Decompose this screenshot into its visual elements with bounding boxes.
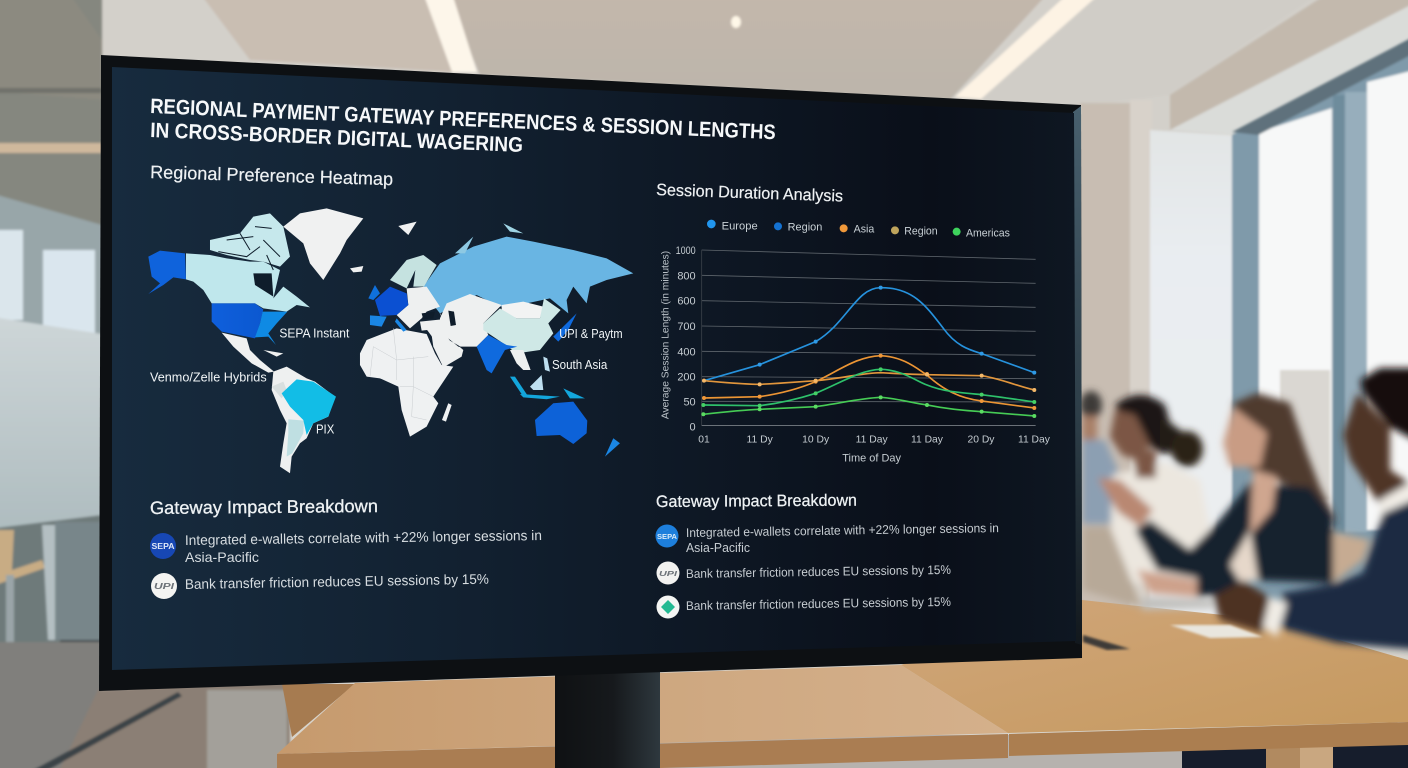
Alaska bbox=[148, 251, 186, 294]
China bbox=[483, 298, 561, 353]
y axis labels: 600 bbox=[677, 296, 696, 308]
India bbox=[477, 335, 517, 373]
text: bank transfer: Bank transfer friction reduces EU sessions by 15% bbox=[686, 563, 951, 581]
legend: Europe bbox=[722, 220, 758, 232]
text: e-wallets: Integrated e-wallets correlate with +22% longer sessions in bbox=[686, 521, 999, 540]
icon: green diamond bbox=[656, 596, 680, 618]
map labels: SEPA Instant bbox=[279, 325, 350, 340]
monitor right edge bbox=[1073, 106, 1082, 645]
y axis labels: 1000 bbox=[676, 245, 696, 257]
Indonesia bbox=[510, 375, 585, 399]
chair bbox=[1333, 532, 1370, 583]
legend bbox=[707, 220, 1010, 239]
person: far left man bbox=[1080, 391, 1102, 419]
y axis labels bbox=[676, 245, 696, 434]
x axis labels: 11 Day bbox=[911, 434, 944, 445]
table left front bbox=[277, 734, 1008, 768]
x axis labels: 11 Day bbox=[856, 434, 888, 445]
y axis labels: 0 bbox=[690, 422, 696, 434]
y axis labels: 200 bbox=[677, 371, 696, 383]
icon: UPI bbox=[151, 573, 177, 599]
heading: Gateway Impact Breakdown bbox=[656, 492, 857, 511]
series: orange peak bbox=[702, 354, 1036, 410]
x axis labels: 10 Dy bbox=[802, 434, 830, 445]
under-table background bbox=[660, 735, 1408, 768]
Madagascar bbox=[442, 403, 452, 422]
legend: Region bbox=[904, 225, 938, 237]
Africa borders bbox=[370, 303, 473, 420]
left office glass bbox=[0, 0, 102, 768]
series: green lower bbox=[701, 395, 1036, 418]
world map heatmap bbox=[148, 208, 633, 473]
map labels: UPI & Paytm bbox=[559, 326, 623, 341]
people bbox=[1080, 368, 1408, 650]
panel: right gateway impact breakdown: Asia-Pacific bbox=[686, 541, 750, 555]
Africa bbox=[360, 328, 453, 437]
Brazil bbox=[282, 379, 336, 435]
dashboard screen bbox=[112, 67, 1076, 670]
Iran and Central Asia bbox=[440, 294, 502, 347]
Caribbean bbox=[263, 350, 283, 357]
y axis labels: 50 bbox=[683, 396, 696, 408]
cable tray bbox=[1083, 635, 1130, 650]
series: tan bbox=[702, 373, 1036, 392]
icon: SEPA bbox=[656, 524, 678, 548]
Arabia bbox=[432, 335, 463, 367]
Spain bbox=[370, 315, 387, 327]
person: man in navy suit bbox=[1360, 368, 1408, 443]
text: bank transfer: Bank transfer friction reduces EU sessions by 15% bbox=[185, 571, 489, 592]
laptop bbox=[1083, 527, 1142, 608]
panel: left gateway impact breakdown: Asia-Pacific bbox=[185, 549, 259, 565]
UK and Ireland bbox=[368, 285, 380, 300]
y axis title: Average Session Length (in minutes) bbox=[660, 251, 671, 419]
right wall and windows bbox=[1080, 28, 1408, 643]
person: woman in black blazer bbox=[1233, 393, 1337, 522]
ceiling lights bbox=[422, 0, 477, 72]
Scandinavia bbox=[390, 255, 437, 288]
Argentina bbox=[287, 419, 304, 457]
Canada bbox=[186, 253, 310, 312]
Italy bbox=[395, 318, 407, 332]
map labels: South Asia bbox=[552, 357, 608, 372]
icon: SEPA bbox=[150, 533, 176, 559]
legend: Americas bbox=[966, 227, 1010, 239]
floor bbox=[30, 680, 290, 768]
title: REGIONAL PAYMENT GATEWAY PREFERENCES & SESSION LENGTHS bbox=[150, 95, 776, 144]
Japan bbox=[553, 313, 577, 342]
Caspian Sea bbox=[448, 311, 456, 326]
Eastern Europe bbox=[397, 287, 440, 328]
Hudson Bay bbox=[253, 273, 273, 297]
x axis labels bbox=[698, 434, 1051, 445]
text: bank transfer repeat: Bank transfer friction reduces EU sessions by 15% bbox=[686, 595, 951, 613]
map labels: PIX bbox=[316, 421, 335, 436]
x axis labels: 11 Day bbox=[1018, 434, 1051, 445]
New Zealand bbox=[605, 438, 620, 457]
y axis labels: 800 bbox=[677, 270, 696, 282]
wooden chair bbox=[282, 684, 355, 737]
icon: UPI: UPI bbox=[659, 571, 679, 578]
Levant bbox=[427, 325, 450, 340]
Philippines bbox=[543, 357, 550, 372]
ceiling bbox=[0, 0, 1408, 135]
line chart: session duration bbox=[660, 220, 1051, 465]
table right front bbox=[1009, 722, 1408, 756]
text: e-wallets: Integrated e-wallets correlate with +22% longer sessions in bbox=[185, 527, 542, 548]
Eastern USA bbox=[255, 312, 287, 345]
Persian Gulf bbox=[448, 338, 462, 347]
x axis labels: 01 bbox=[698, 434, 710, 445]
Arctic Russian islands bbox=[398, 222, 417, 235]
table right top bbox=[901, 600, 1408, 733]
x axis labels: 11 Dy bbox=[747, 434, 774, 445]
heading: session duration analysis: Session Duration Analysis bbox=[656, 181, 843, 206]
Germany and France bbox=[375, 287, 408, 316]
icon: UPI bbox=[656, 562, 680, 584]
panel: right gateway impact breakdown bbox=[656, 492, 999, 618]
icon: SEPA: SEPA bbox=[152, 542, 175, 551]
y axis labels: 700 bbox=[677, 321, 696, 333]
series: blue bbox=[704, 286, 1036, 381]
table left top bbox=[277, 665, 1008, 754]
x axis title: Time of Day bbox=[842, 453, 902, 465]
Mexico and Central America bbox=[222, 333, 274, 373]
icon: SEPA: SEPA bbox=[657, 534, 677, 541]
Russia bbox=[423, 237, 633, 313]
legend: Asia bbox=[854, 224, 875, 236]
Turkey bbox=[420, 319, 442, 331]
series: green upper bbox=[701, 367, 1036, 408]
heading: Gateway Impact Breakdown bbox=[150, 496, 378, 518]
Greenland bbox=[283, 208, 363, 280]
y axis labels: 400 bbox=[677, 346, 696, 358]
monitor stand bbox=[555, 670, 660, 768]
legend: Region bbox=[788, 222, 822, 234]
Colombia bbox=[272, 382, 287, 398]
title: IN CROSS-BORDER DIGITAL WAGERING bbox=[150, 119, 523, 157]
Australia bbox=[535, 402, 587, 444]
Arctic islands bbox=[210, 213, 290, 267]
panel: left gateway impact breakdown bbox=[150, 496, 542, 599]
heading: regional preference heatmap: Regional Preference Heatmap bbox=[150, 162, 393, 189]
x axis labels: 20 Dy bbox=[967, 434, 995, 445]
notebook on table bbox=[1170, 625, 1263, 638]
Mongolia bbox=[502, 302, 543, 318]
map labels bbox=[150, 325, 623, 436]
Southeast Asia bbox=[510, 350, 531, 370]
USA bbox=[212, 303, 263, 338]
soffit bbox=[1170, 0, 1408, 130]
South America bbox=[272, 367, 335, 473]
person: woman in white bbox=[1110, 462, 1212, 590]
Black Sea bbox=[422, 312, 435, 319]
map labels: Venmo/Zelle Hybrids bbox=[150, 370, 267, 385]
monitor bezel bbox=[99, 55, 1082, 691]
icon: UPI: UPI bbox=[154, 582, 175, 591]
grid lines bbox=[702, 250, 1036, 426]
